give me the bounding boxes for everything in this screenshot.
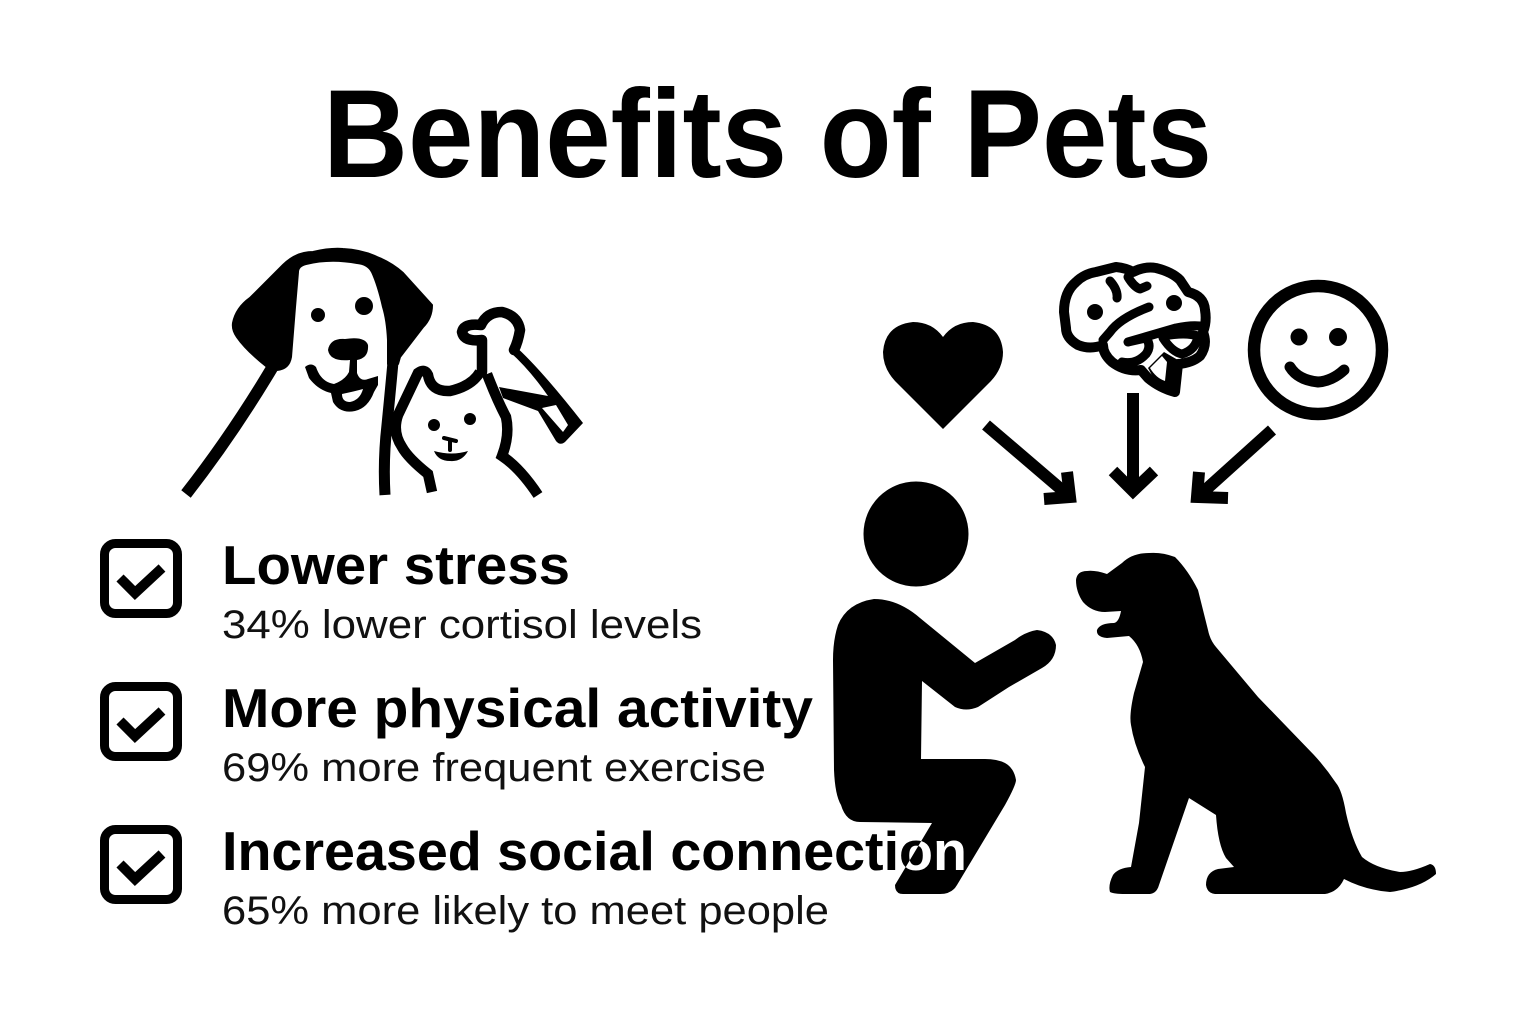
checkbox icon [104, 830, 178, 900]
detail text: 69% more frequent exercise [222, 746, 766, 790]
icon: brain [1064, 267, 1206, 394]
dog tongue [342, 389, 363, 402]
brain folds [1103, 277, 1200, 363]
arrow: brain to pair [1113, 393, 1154, 491]
icon: smiley face [1254, 286, 1382, 414]
icon: dog, cat and bird line illustration [186, 249, 583, 495]
cat outline [396, 371, 480, 492]
detail text: 65% more likely to meet people [222, 889, 829, 933]
checkbox icon [104, 686, 178, 756]
icon: heart [883, 322, 1003, 429]
dog eyes [311, 297, 373, 322]
checklist item: more physical activity [104, 677, 813, 790]
detail text: 34% lower cortisol levels [222, 603, 702, 647]
heading: Increased social connection [222, 820, 967, 882]
dog nose and mouth [305, 338, 378, 412]
brain stem [1148, 352, 1178, 394]
illustration: kneeling person [833, 482, 1056, 894]
arrow: smile to pair [1197, 430, 1272, 498]
person body [833, 599, 1056, 894]
dog left leg line [186, 368, 272, 494]
checklist item: increased social connection [104, 820, 967, 933]
bird body, wing and tail [499, 345, 583, 444]
cat face [428, 413, 476, 461]
bird head and beak [462, 312, 520, 372]
illustration: sitting dog silhouette [1076, 553, 1436, 894]
arrow: heart to pair [986, 425, 1070, 499]
heading: More physical activity [222, 677, 813, 739]
brain outline [1064, 267, 1206, 392]
checklist item: lower stress [104, 534, 702, 647]
dog head and ears [233, 249, 432, 370]
brain dots [1087, 295, 1182, 320]
heading: Lower stress [222, 534, 570, 596]
checkbox icon [104, 544, 178, 614]
title: Benefits of Pets [323, 65, 1212, 204]
person head [864, 482, 968, 586]
dog neck right line [384, 362, 393, 495]
